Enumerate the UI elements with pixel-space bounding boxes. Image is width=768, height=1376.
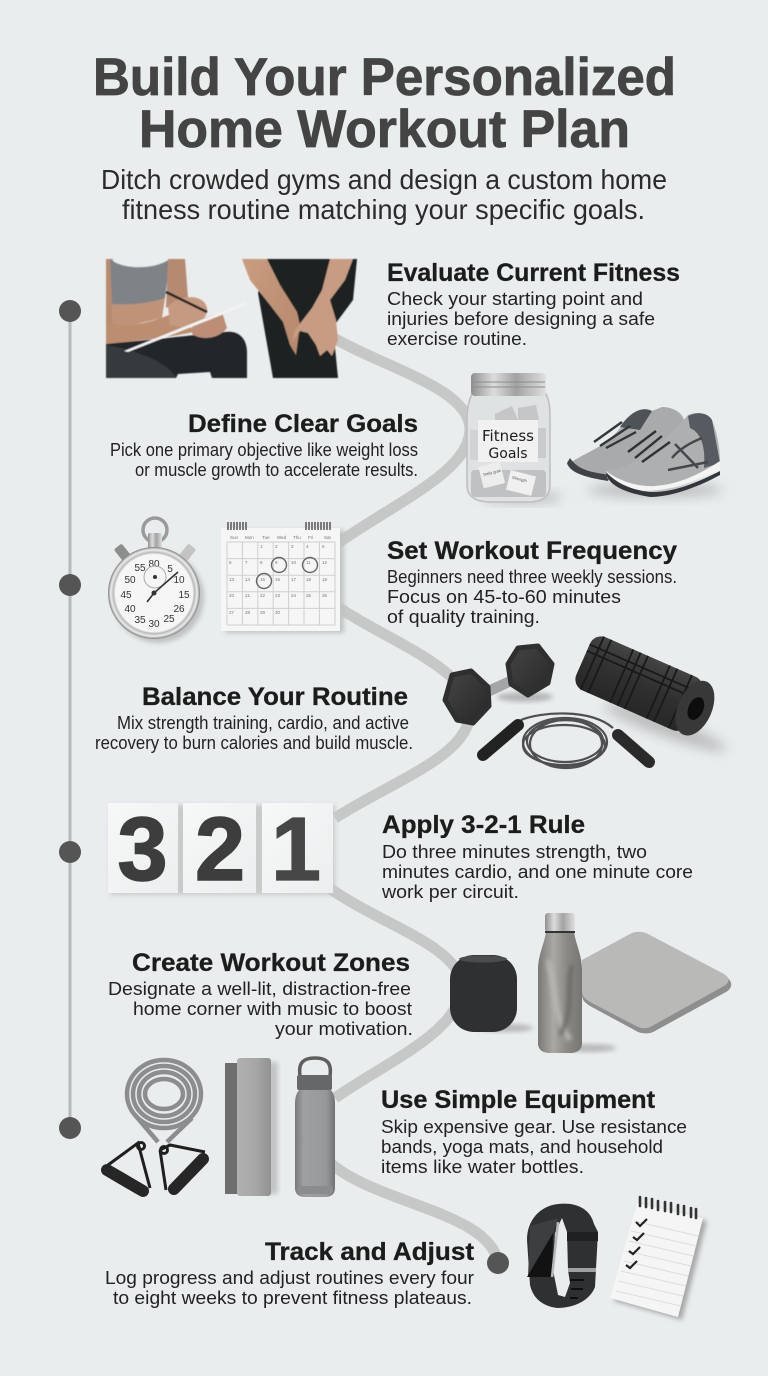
step 5 text: Apply 3-2-1 Rule: Do three minutes strength, two: [382, 841, 647, 862]
icon: stopwatch: 26: [173, 604, 185, 615]
step 1 text: Evaluate Current Fitness: Check your starting point and: [387, 288, 643, 309]
icon: calendar with circled days: Mon: [245, 535, 254, 540]
step 6 text: Create Workout Zones: home corner with music to boost: [133, 998, 412, 1019]
timeline rail with dots: [59, 300, 81, 1139]
subtitle: fitness routine matching your specific goals.: [122, 194, 645, 225]
step 3 text: Set Workout Frequency: Beginners need three weekly sessions.: [387, 566, 677, 587]
icon: calendar with circled days: 23: [275, 593, 281, 598]
step 2 text: Define Clear Goals: [110, 410, 418, 480]
step 4 text: Balance Your Routine: [95, 683, 413, 753]
step 6 text: Create Workout Zones: your motivation.: [275, 1018, 413, 1039]
icon: calendar with circled days: 9: [275, 560, 278, 565]
icon: calendar with circled days: 2: [275, 544, 278, 549]
card: 1: 1: [271, 800, 321, 900]
icon: rolled yoga mat: [225, 1058, 278, 1196]
icon: calendar with circled days: 7: [245, 560, 248, 565]
icon: calendar with circled days: 14: [245, 577, 251, 582]
icon: running shoes: [567, 407, 723, 497]
step 7 text: Use Simple Equipment: items like water bottles.: [381, 1156, 584, 1177]
icon: calendar with circled days: 29: [260, 610, 266, 615]
icon: grey bath mat: [582, 932, 731, 1033]
step 8 text: Track and Adjust: Track and Adjust: [265, 1238, 475, 1266]
icon: fitness goals jar: Fitness: [482, 427, 534, 445]
icon: calendar with circled days: 25: [306, 593, 312, 598]
icon: clear water bottle: [295, 1058, 335, 1197]
icon: calendar with circled days: 6: [229, 560, 232, 565]
step 4 text: Balance Your Routine: recovery to burn calories and build muscle.: [95, 732, 413, 753]
step 3 text: Set Workout Frequency: [387, 537, 677, 627]
icon: calendar with circled days: 21: [245, 593, 251, 598]
step 2 text: Define Clear Goals: Pick one primary objective like weight loss: [110, 439, 418, 460]
icon: calendar with circled days: 30: [275, 610, 281, 615]
step 3 text: Set Workout Frequency: Set Workout Frequency: [387, 537, 677, 565]
icon: stopwatch: 55: [134, 563, 146, 574]
icon: calendar with circled days: 15: [260, 577, 266, 582]
icon: hex dumbbell: [445, 646, 553, 723]
subtitle: Ditch crowded gyms and design a custom home: [101, 164, 667, 195]
icon: stopwatch: 40: [124, 604, 136, 615]
card: 2: [183, 800, 256, 900]
icon: stopwatch: 30: [148, 619, 160, 630]
icon: fitness goals jar: Goals: [488, 446, 528, 462]
step 2 text: Define Clear Goals: or muscle growth to accelerate results.: [135, 459, 418, 480]
icon: calendar with circled days: Thu: [293, 535, 301, 540]
step 6 text: Create Workout Zones: Create Workout Zones: [132, 949, 410, 977]
icon: calendar with circled days: 20: [229, 593, 235, 598]
icon: spiral notebook with checklist: [610, 1197, 707, 1320]
photo: hands on knee: [242, 259, 357, 378]
icon: calendar with circled days: 28: [245, 610, 251, 615]
winding connector path: [325, 336, 509, 1274]
step 7 text: Use Simple Equipment: Use Simple Equipment: [381, 1086, 656, 1114]
card: 2: 2: [195, 800, 245, 900]
step 1 text: Evaluate Current Fitness: injuries before designing a safe: [387, 308, 655, 329]
step 4 text: Balance Your Routine: Mix strength training, cardio, and active: [117, 712, 409, 733]
icon: fitness goals jar: Daily goal: [483, 468, 501, 477]
step 1 text: Evaluate Current Fitness: exercise routine.: [387, 328, 527, 349]
icon: calendar with circled days: [221, 522, 344, 633]
icon: calendar with circled days: 13: [229, 577, 235, 582]
icon: calendar with circled days: 19: [322, 577, 328, 582]
icon: calendar with circled days: 11: [306, 560, 311, 565]
icon: stopwatch: 35: [134, 615, 146, 626]
step 6 text: Create Workout Zones: [108, 949, 413, 1039]
icon: fitness tracker band: [527, 1204, 598, 1308]
step 5 text: Apply 3-2-1 Rule: minutes cardio, and one minute core: [382, 861, 693, 882]
card: 3: 3: [117, 800, 168, 900]
icon: stopwatch: 10: [173, 575, 185, 586]
icon: calendar with circled days: 22: [260, 593, 266, 598]
icon: resistance band: [107, 1060, 205, 1191]
icon: steel water bottle: [538, 913, 616, 1053]
subtitle: [101, 164, 667, 225]
icon: calendar with circled days: 17: [291, 577, 297, 582]
icon: calendar with circled days: 27: [229, 610, 235, 615]
icon: fitness goals jar: [467, 373, 562, 502]
3-2-1 number cards: [108, 800, 335, 900]
icon: stopwatch: 80: [148, 559, 160, 570]
title: Build Your Personalized: [93, 48, 676, 107]
icon: calendar with circled days: 4: [306, 544, 309, 549]
step 8 text: Track and Adjust: [105, 1238, 475, 1308]
icon: foam roller: [572, 633, 729, 758]
icon: calendar with circled days: Tue: [262, 535, 270, 540]
icon: stopwatch: 5: [167, 564, 173, 575]
icon: calendar with circled days: 18: [306, 577, 312, 582]
step 1 text: Evaluate Current Fitness: Evaluate Current Fitness: [387, 259, 680, 287]
icon: fitness goals jar: Strength: [512, 475, 527, 483]
icon: stopwatch: [108, 518, 204, 643]
icon: calendar with circled days: 1: [260, 544, 263, 549]
step 2 text: Define Clear Goals: Define Clear Goals: [188, 410, 418, 438]
title: Home Workout Plan: [139, 100, 630, 159]
step 5 text: Apply 3-2-1 Rule: Apply 3-2-1 Rule: [382, 811, 585, 839]
icon: calendar with circled days: Sat: [324, 535, 332, 540]
title: [93, 48, 676, 159]
step 3 text: Set Workout Frequency: Focus on 45-to-60 minutes: [387, 586, 621, 607]
icon: stopwatch: 50: [124, 575, 136, 586]
icon: smart speaker: [450, 955, 533, 1032]
icon: calendar with circled days: 5: [322, 544, 325, 549]
icon: stopwatch: 45: [120, 590, 132, 601]
icon: stopwatch: 25: [163, 614, 175, 625]
icon: calendar with circled days: 3: [291, 544, 294, 549]
step 7 text: Use Simple Equipment: [381, 1086, 687, 1177]
icon: calendar with circled days: Fri: [308, 535, 313, 540]
icon: calendar with circled days: 26: [322, 593, 328, 598]
icon: jump rope: [483, 713, 649, 768]
icon: calendar with circled days: 12: [322, 560, 328, 565]
icon: calendar with circled days: 10: [291, 560, 297, 565]
step 3 text: Set Workout Frequency: of quality training.: [387, 606, 540, 627]
step 8 text: Track and Adjust: Log progress and adjust routines every four: [105, 1267, 474, 1288]
photo: woman writing on clipboard: [106, 259, 247, 378]
icon: calendar with circled days: Wed: [277, 535, 287, 540]
icon: calendar with circled days: 16: [275, 577, 281, 582]
step 8 text: Track and Adjust: to eight weeks to prevent fitness plateaus.: [113, 1287, 472, 1308]
step 6 text: Create Workout Zones: Designate a well-lit, distraction-free: [108, 978, 411, 999]
icon: stopwatch: 15: [178, 590, 190, 601]
step 5 text: Apply 3-2-1 Rule: [381, 811, 693, 902]
icon: calendar with circled days: Sun: [230, 535, 239, 540]
icon: calendar with circled days: 24: [291, 593, 297, 598]
step 5 text: Apply 3-2-1 Rule: work per circuit.: [381, 881, 519, 902]
step 7 text: Use Simple Equipment: bands, yoga mats, and household: [381, 1136, 663, 1157]
step 7 text: Use Simple Equipment: Skip expensive gear. Use resistance: [381, 1116, 687, 1137]
step 4 text: Balance Your Routine: Balance Your Routine: [142, 683, 408, 711]
icon: calendar with circled days: 8: [260, 560, 263, 565]
step 1 text: Evaluate Current Fitness: [387, 259, 680, 349]
